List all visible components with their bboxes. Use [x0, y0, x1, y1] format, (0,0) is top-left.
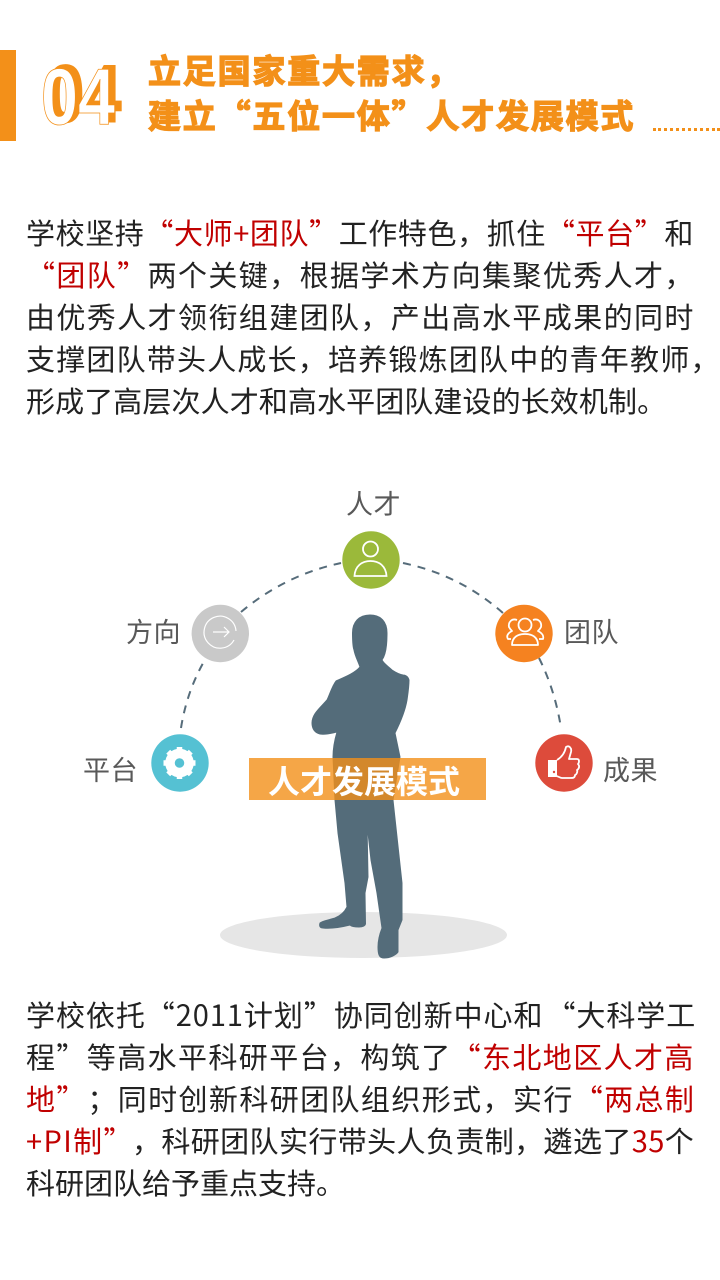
intro paragraph: 由优秀人才领衔组建团队，产出高水平成果的同时	[26, 295, 695, 337]
diagram labels	[83, 483, 658, 788]
closing paragraph: 科研团队给予重点支持。	[26, 1161, 345, 1203]
icon: person	[354, 542, 386, 576]
intro paragraph: 支撑团队带头人成长，培养锻炼团队中的青年教师，	[26, 337, 720, 379]
dashed arcs	[181, 563, 561, 728]
icon: arrow in circle	[204, 616, 236, 648]
node: 平台	[151, 734, 209, 792]
title: 建立“五位一体”人才发展模式	[148, 90, 635, 138]
banner: 人才发展模式	[268, 757, 460, 803]
node: 成果	[535, 734, 593, 792]
accent bar	[0, 50, 16, 141]
icon: team	[507, 618, 543, 645]
intro paragraph: 形成了高层次人才和高水平团队建设的长效机制。	[26, 379, 666, 421]
dotted title rule	[653, 128, 720, 131]
ground shadow	[220, 912, 507, 958]
node: 人才	[342, 531, 400, 589]
title: 立足国家重大需求，	[148, 45, 461, 93]
intro paragraph: “团队”两个关键，根据学术方向集聚优秀人才，	[26, 253, 695, 295]
closing paragraph: +PI制” ，科研团队实行带头人负责制，遴选了35个	[26, 1119, 694, 1161]
intro paragraph	[26, 211, 720, 421]
diagram labels: 方向	[126, 611, 181, 650]
diagram labels: 团队	[564, 611, 619, 650]
intro paragraph: 学校坚持“大师+团队”工作特色，抓住“平台”和	[26, 211, 694, 253]
node: 团队	[495, 605, 553, 662]
title	[148, 45, 635, 138]
icon: gear	[164, 747, 196, 779]
section number 04: 04	[41, 52, 115, 140]
node: 方向	[192, 605, 249, 662]
icon: thumbs up	[548, 746, 579, 778]
closing paragraph	[26, 993, 696, 1203]
closing paragraph: 地” ；同时创新科研团队组织形式，实行“两总制	[26, 1077, 695, 1119]
diagram labels: 平台	[83, 749, 138, 788]
section number 04: 04	[47, 50, 121, 138]
diagram labels: 成果	[603, 749, 658, 788]
closing paragraph: 程”等高水平科研平台，构筑了“东北地区人才高	[26, 1035, 695, 1077]
diagram labels: 人才	[346, 483, 401, 522]
closing paragraph: 学校依托“2011计划”协同创新中心和“大科学工	[26, 993, 696, 1035]
figure silhouette	[312, 615, 409, 958]
